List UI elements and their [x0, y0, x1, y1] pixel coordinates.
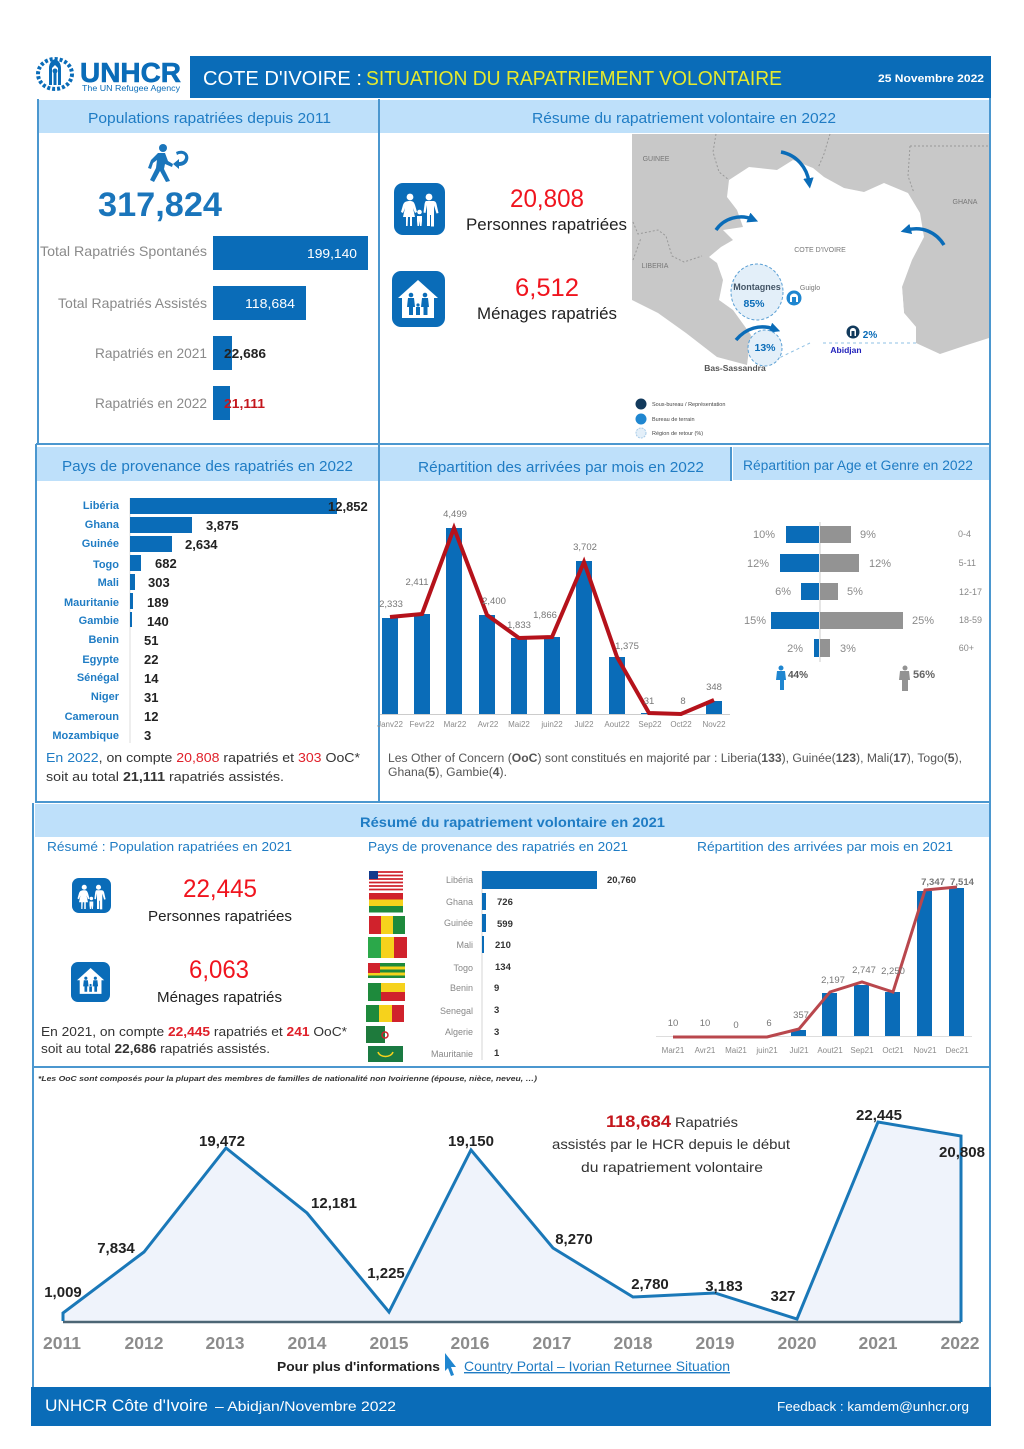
stat: menages: Ménages rapatriés — [477, 304, 617, 323]
bar chart: totals: Rapatriés en 2022 — [95, 395, 207, 411]
bar chart: countries 2022: 189 — [147, 595, 169, 610]
map labels: Bas-Sassandra — [704, 363, 766, 373]
icon: women — [899, 666, 935, 691]
combo chart 2022: 4,499 — [443, 509, 467, 520]
text: note 2022 — [46, 750, 360, 784]
callout: 118,684 rapatries — [552, 1112, 790, 1175]
combo chart 2021 — [656, 877, 975, 1055]
combo chart 2022: 2,411 — [405, 577, 429, 588]
icon: returnee walking — [148, 144, 188, 182]
area chart: rapatries 2011-2022: 2011 — [43, 1333, 81, 1353]
bar chart: countries 2021: 726 — [497, 897, 513, 908]
bar chart: countries 2022: Cameroun — [65, 711, 119, 723]
bar chart: countries 2021: 9 — [494, 983, 499, 994]
bar chart: countries 2021: 3 — [494, 1005, 499, 1016]
office marker: Guiglo — [786, 285, 820, 306]
bar chart: totals: 22,686 — [224, 346, 266, 361]
arrow: north — [781, 152, 809, 182]
pyramid chart: 5% — [847, 586, 863, 598]
sub-panel: population 2021: Résumé : Population rapatriées en 2021 — [47, 839, 292, 854]
bar chart: countries 2022: Ghana — [85, 519, 120, 531]
flag: Mali — [368, 937, 407, 958]
combo chart 2021: 7,514 — [950, 877, 975, 888]
bar chart: countries 2021: Benin — [450, 983, 473, 993]
combo chart 2022: Avr22 — [478, 720, 499, 729]
heading: Pays de provenance des rapatriés en 2022 — [62, 459, 353, 475]
bar chart: countries 2022: 140 — [147, 614, 169, 629]
combo chart 2022: Jul22 — [574, 720, 594, 729]
bar chart: countries 2022: 3 — [144, 728, 151, 743]
area chart: rapatries 2011-2022: 3,183 — [705, 1278, 743, 1295]
heading — [380, 100, 989, 133]
bar chart: countries 2022: Niger — [91, 691, 120, 703]
combo chart 2022 — [377, 509, 730, 729]
map legend: Bureau de terrain — [652, 417, 694, 423]
combo chart 2022: Aout22 — [604, 720, 630, 729]
stat: personnes 2021: 22,445 — [183, 875, 257, 903]
combo chart 2021: Dec21 — [945, 1046, 969, 1055]
combo chart 2021: 2,250 — [881, 966, 905, 977]
text: note 2022: En 2022 , on compte 20,808 rapatriés et 303 OoC* — [46, 750, 360, 765]
area chart: rapatries 2011-2022: 2016 — [451, 1333, 490, 1353]
arrow: west — [716, 217, 752, 230]
stat: menages 2021 — [157, 956, 282, 1006]
combo chart 2022: Mar22 — [444, 720, 467, 729]
pyramid chart — [744, 522, 982, 691]
map labels: GHANA — [953, 199, 978, 206]
map legend: Sous-bureau / Représentation — [652, 402, 725, 408]
area chart: rapatries 2011-2022: 2,780 — [631, 1276, 669, 1293]
arrow: south-west — [736, 327, 774, 340]
heading — [35, 804, 989, 837]
area chart: rapatries 2011-2022: 20,808 — [939, 1144, 985, 1161]
bar chart: totals: Total Rapatriés Assistés — [58, 295, 207, 311]
text: OoC note: Les Other of Concern ( OoC) sont constitués en majorité par : Liberia( 133), Guinée( 123), Mali(17), Togo(5), — [388, 753, 962, 765]
bar chart: countries 2022: 22 — [144, 652, 158, 667]
bar chart: countries 2022: 12 — [144, 709, 158, 724]
title bar: SITUATION DU RAPATRIEMENT VOLONTAIRE — [366, 68, 782, 90]
sub-panel: population 2021 — [41, 839, 347, 1056]
heading: Résumé du rapatriement volontaire en 2021 — [360, 814, 665, 830]
area chart: rapatries 2011-2022: 1,009 — [44, 1284, 82, 1301]
combo chart 2021: 2,197 — [821, 975, 845, 986]
bar chart: countries 2022: 14 — [144, 671, 159, 686]
bar chart: totals: 199,140 — [307, 246, 357, 261]
bar chart: countries 2022: 12,852 — [328, 499, 368, 514]
map labels: LIBERIA — [642, 263, 669, 270]
stat: personnes 2021 — [148, 875, 292, 925]
heading — [731, 447, 989, 481]
flag: Mauritanie — [368, 1046, 403, 1062]
pyramid chart: 2% — [787, 643, 803, 655]
pyramid chart: 6% — [775, 586, 791, 598]
office marker: Abidjan: Abidjan — [830, 345, 862, 355]
area chart: rapatries 2011-2022: 12,181 — [311, 1195, 357, 1212]
map — [632, 134, 989, 438]
icon: men — [776, 666, 808, 690]
bar chart: countries 2021: 134 — [495, 962, 512, 973]
heading — [39, 100, 378, 133]
area chart: rapatries 2011-2022: 2015 — [370, 1333, 409, 1353]
total figure: 317,824 — [98, 186, 222, 224]
pyramid chart: 60+ — [959, 643, 974, 653]
callout: 118,684 rapatries: 118,684 — [606, 1112, 672, 1131]
icon: family — [394, 183, 445, 235]
area chart: rapatries 2011-2022: 7,834 — [97, 1240, 135, 1257]
pyramid chart: 10% — [753, 529, 775, 541]
bar chart: totals: 21,111 — [224, 396, 265, 411]
flag: Togo — [368, 963, 405, 978]
combo chart 2021: 2,747 — [852, 965, 876, 976]
combo chart 2022: Oct22 — [670, 720, 692, 729]
bar chart: countries 2021: 3 — [494, 1027, 499, 1038]
icon: family 2021 — [72, 878, 111, 913]
combo chart 2021: Mai21 — [725, 1046, 747, 1055]
bar chart: countries 2022: Mali — [98, 577, 119, 589]
heading: Résume du rapatriement volontaire en 2022 — [532, 111, 836, 127]
bar chart: countries 2022: 3,875 — [206, 518, 239, 533]
area chart: rapatries 2011-2022: 1,225 — [367, 1265, 405, 1282]
combo chart 2021: 10 — [668, 1018, 678, 1029]
bar chart: totals: 118,684 — [245, 296, 295, 311]
area chart: rapatries 2011-2022: 2018 — [614, 1333, 653, 1353]
stat: personnes: Personnes rapatriées — [466, 215, 627, 234]
text: OoC note — [388, 753, 962, 779]
bar chart: countries 2021 — [431, 870, 636, 1060]
footer: Feedback : kamdem@unhcr.org — [777, 1399, 969, 1414]
area chart: rapatries 2011-2022: 19,472 — [199, 1133, 245, 1150]
bar chart: countries 2021: 599 — [497, 919, 513, 930]
logo: UNHCR — [38, 57, 181, 93]
sub-panel: arrivees 2021: Répartition des arrivées par mois en 2021 — [697, 839, 953, 854]
office marker: Guiglo: Guiglo — [800, 285, 820, 292]
pyramid chart: 12% — [869, 558, 891, 570]
bar chart: countries 2022 — [52, 498, 368, 743]
bar chart: countries 2022: Sénégal — [77, 672, 119, 684]
icon: household — [392, 271, 445, 327]
combo chart 2022: Janv22 — [377, 720, 403, 729]
combo chart 2021: Nov21 — [913, 1046, 937, 1055]
area chart: rapatries 2011-2022: 327 — [770, 1288, 796, 1305]
pyramid chart: 15% — [744, 615, 766, 627]
bar chart: countries 2021: Mauritanie — [431, 1049, 473, 1059]
combo chart 2021: 10 — [700, 1018, 710, 1029]
footer: UNHCR Côte d'Ivoire — [45, 1396, 208, 1415]
callout: 118,684 rapatries: assistés par le HCR depuis le début — [552, 1136, 790, 1152]
trend line — [390, 528, 714, 714]
flag: Algerie — [366, 1026, 388, 1043]
region circle: Montagnes — [731, 264, 783, 320]
flags — [366, 871, 407, 1062]
footer: – Abidjan/Novembre 2022 — [215, 1398, 396, 1414]
section: resume 2021 — [35, 804, 989, 1062]
bar chart: totals: Total Rapatriés Spontanés — [40, 243, 207, 259]
flag: Guinee — [369, 916, 405, 934]
bar chart: countries 2022: 31 — [144, 690, 158, 705]
combo chart 2022: 3,702 — [573, 542, 597, 553]
bar chart: countries 2021: Togo — [453, 963, 473, 973]
text: note 2021: En 2021, on compte 22,445 rapatriés et 241 OoC* — [41, 1024, 347, 1039]
map legend: Région de retour (%) — [652, 431, 703, 437]
bar chart: countries 2021: 210 — [495, 940, 511, 951]
combo chart 2021: 357 — [793, 1010, 809, 1021]
combo chart 2022: juin22 — [540, 720, 563, 729]
map labels: COTE D'IVOIRE — [794, 247, 846, 254]
area chart: rapatries 2011-2022: 2017 — [533, 1333, 571, 1353]
footer — [31, 1387, 991, 1426]
heading — [37, 447, 378, 481]
more information line: Country Portal – Ivorian Returnee Situation — [464, 1358, 730, 1374]
stat: menages: 6,512 — [515, 274, 579, 302]
panel: age et genre 2022 — [731, 447, 989, 691]
footnote: *Les OoC sont composés pour la plupart des membres de familles de nationalité non Ivoirienne (épouse, nièce, neveu, …) — [38, 1074, 538, 1083]
combo chart 2022: 8 — [680, 696, 686, 707]
pyramid chart: 25% — [912, 615, 934, 627]
combo chart 2021: 7,347 — [921, 877, 945, 888]
region circle: Montagnes: 85% — [743, 298, 765, 310]
stat: menages — [477, 274, 617, 323]
area chart: rapatries 2011-2022: 2014 — [288, 1333, 327, 1353]
more information line: Pour plus d'informations — [277, 1359, 440, 1374]
combo chart 2022: Sep22 — [638, 720, 662, 729]
bar chart: countries 2022: 51 — [144, 633, 158, 648]
trend line — [673, 887, 957, 1037]
icon: UNHCR emblem — [38, 59, 72, 89]
heading — [380, 447, 730, 481]
title bar: COTE D'IVOIRE : — [203, 68, 362, 90]
bar chart: countries 2022: 303 — [148, 575, 170, 590]
icon: cursor — [445, 1353, 456, 1376]
icon: women: 56% — [913, 669, 935, 681]
icon: household 2021 — [71, 962, 110, 1002]
bar chart: countries 2021: Libéria — [446, 875, 473, 885]
panel: populations rapatriees depuis 2011 — [39, 100, 378, 420]
stat: personnes — [466, 185, 627, 234]
arrow: east — [907, 229, 944, 245]
bar chart: countries 2022: 2,634 — [185, 537, 218, 552]
more information line — [277, 1353, 730, 1376]
combo chart 2022: Fevr22 — [410, 720, 435, 729]
combo chart 2022: 31 — [644, 696, 654, 707]
area chart: rapatries 2011-2022: 2012 — [125, 1333, 164, 1353]
combo chart 2022: 1,375 — [615, 641, 639, 652]
combo chart 2022: Nov22 — [702, 720, 726, 729]
panel: pays de provenance 2022 — [37, 447, 378, 784]
bar chart: countries 2022: Mauritanie — [64, 597, 119, 609]
combo chart 2022: Mai22 — [508, 720, 530, 729]
bar chart: countries 2021: Algerie — [445, 1027, 473, 1037]
office marker: Abidjan: 2% — [863, 330, 877, 341]
bar chart: countries 2022: 682 — [155, 556, 177, 571]
bar chart: totals: Rapatriés en 2021 — [95, 345, 207, 361]
bar chart: countries 2022: Libéria — [83, 500, 120, 512]
text: note 2022: soit au total 21,111 rapatriés assistés. — [46, 769, 284, 784]
logo: UNHCR: The UN Refugee Agency — [82, 84, 180, 93]
combo chart 2021: 6 — [766, 1018, 772, 1029]
area chart: rapatries 2011-2022: 2020 — [778, 1333, 817, 1353]
flag: Senegal — [366, 1005, 404, 1022]
bar chart: countries 2022: Benin — [88, 634, 119, 646]
bar chart: countries 2021: Guinée — [444, 918, 473, 928]
panel: resume 2022 — [380, 100, 989, 438]
bar chart: countries 2021: Mali — [456, 940, 473, 950]
bar chart: countries 2021: 1 — [494, 1048, 500, 1059]
region circle: Bas-Sassandra — [748, 330, 782, 366]
bar chart: countries 2022: Egypte — [82, 654, 119, 666]
heading: Répartition par Age et Genre en 2022 — [743, 458, 973, 473]
combo chart 2021: Oct21 — [882, 1046, 904, 1055]
flag: Benin — [368, 983, 405, 1001]
stat: menages 2021: 6,063 — [189, 956, 249, 984]
bar chart: countries 2021: 20,760 — [607, 875, 636, 886]
combo chart 2021: juin21 — [755, 1046, 778, 1055]
pyramid chart: 3% — [840, 643, 856, 655]
pyramid chart: 9% — [860, 529, 876, 541]
combo chart 2022: 1,833 — [507, 620, 531, 631]
heading: Populations rapatriées depuis 2011 — [88, 111, 331, 127]
bar chart: totals — [40, 236, 368, 420]
map legend — [636, 398, 725, 438]
sub-panel: pays 2021 — [366, 839, 636, 1062]
combo chart 2021: 0 — [733, 1020, 739, 1031]
area chart: rapatries 2011-2022: 8,270 — [555, 1231, 593, 1248]
bar chart: countries 2022: Togo — [93, 559, 119, 571]
area chart: rapatries 2011-2022: 2022 — [941, 1333, 980, 1353]
combo chart 2021: Mar21 — [662, 1046, 685, 1055]
pyramid chart: 5-11 — [959, 558, 976, 568]
area chart: rapatries 2011-2022: 22,445 — [856, 1107, 902, 1124]
combo chart 2021: Aout21 — [817, 1046, 843, 1055]
area chart: rapatries 2011-2022: 2013 — [206, 1333, 245, 1353]
combo chart 2021: Avr21 — [695, 1046, 716, 1055]
bar chart: countries 2022: Mozambique — [52, 730, 119, 742]
area chart: rapatries 2011-2022: 2019 — [696, 1333, 735, 1353]
text: note 2021 — [41, 1024, 347, 1056]
stat: personnes: 20,808 — [510, 185, 584, 213]
bar chart: countries 2022: Gambie — [79, 615, 119, 627]
pyramid chart: 12-17 — [959, 587, 982, 597]
office marker: Abidjan — [830, 326, 877, 355]
stat: menages 2021: Ménages rapatriés — [157, 990, 282, 1006]
combo chart 2022: 2,400 — [482, 596, 506, 607]
logo: UNHCR: UNHCR — [80, 57, 181, 88]
map labels: GUINEE — [643, 156, 670, 163]
combo chart 2022: 1,866 — [533, 610, 557, 621]
callout: 118,684 rapatries: Rapatriés — [675, 1114, 738, 1130]
bar chart: countries 2021: Senegal — [440, 1006, 473, 1016]
text: OoC note: Ghana(5), Gambie( 4). — [388, 767, 507, 779]
header — [38, 56, 991, 98]
flag: Liberia — [369, 871, 403, 890]
region circle: Montagnes: Montagnes — [733, 282, 781, 292]
title bar: 25 Novembre 2022 — [878, 73, 984, 85]
bar chart: countries 2022: Guinée — [82, 538, 119, 550]
map labels — [642, 156, 978, 373]
text: note 2021: soit au total 22,686 rapatriés assistés. — [41, 1041, 270, 1056]
heading: Répartition des arrivées par mois en 2022 — [418, 460, 704, 476]
pyramid chart: 0-4 — [958, 529, 971, 539]
sub-panel: arrivees 2021 — [656, 839, 975, 1055]
stat: personnes 2021: Personnes rapatriées — [148, 909, 292, 925]
pyramid chart: 18-59 — [959, 615, 982, 625]
icon: men: 44% — [788, 670, 808, 681]
flag: Ghana — [369, 893, 403, 912]
sub-panel: pays 2021: Pays de provenance des rapatriés en 2021 — [368, 839, 628, 854]
pyramid chart: 12% — [747, 558, 769, 570]
callout: 118,684 rapatries: du rapatriement volontaire — [581, 1159, 763, 1175]
title bar — [190, 56, 991, 98]
area chart: rapatries 2011-2022: 19,150 — [448, 1133, 494, 1150]
combo chart 2022: 348 — [706, 682, 722, 693]
panel: arrivees par mois 2022 — [377, 447, 962, 779]
region circle: Bas-Sassandra: 13% — [754, 342, 776, 354]
area chart: rapatries 2011-2022: 2021 — [859, 1333, 898, 1353]
combo chart 2022: 2,333 — [379, 599, 403, 610]
bar chart: countries 2021: Ghana — [446, 897, 473, 907]
area chart: rapatries 2011-2022 — [43, 1107, 985, 1353]
combo chart 2021: Sep21 — [850, 1046, 874, 1055]
combo chart 2021: Jul21 — [789, 1046, 809, 1055]
